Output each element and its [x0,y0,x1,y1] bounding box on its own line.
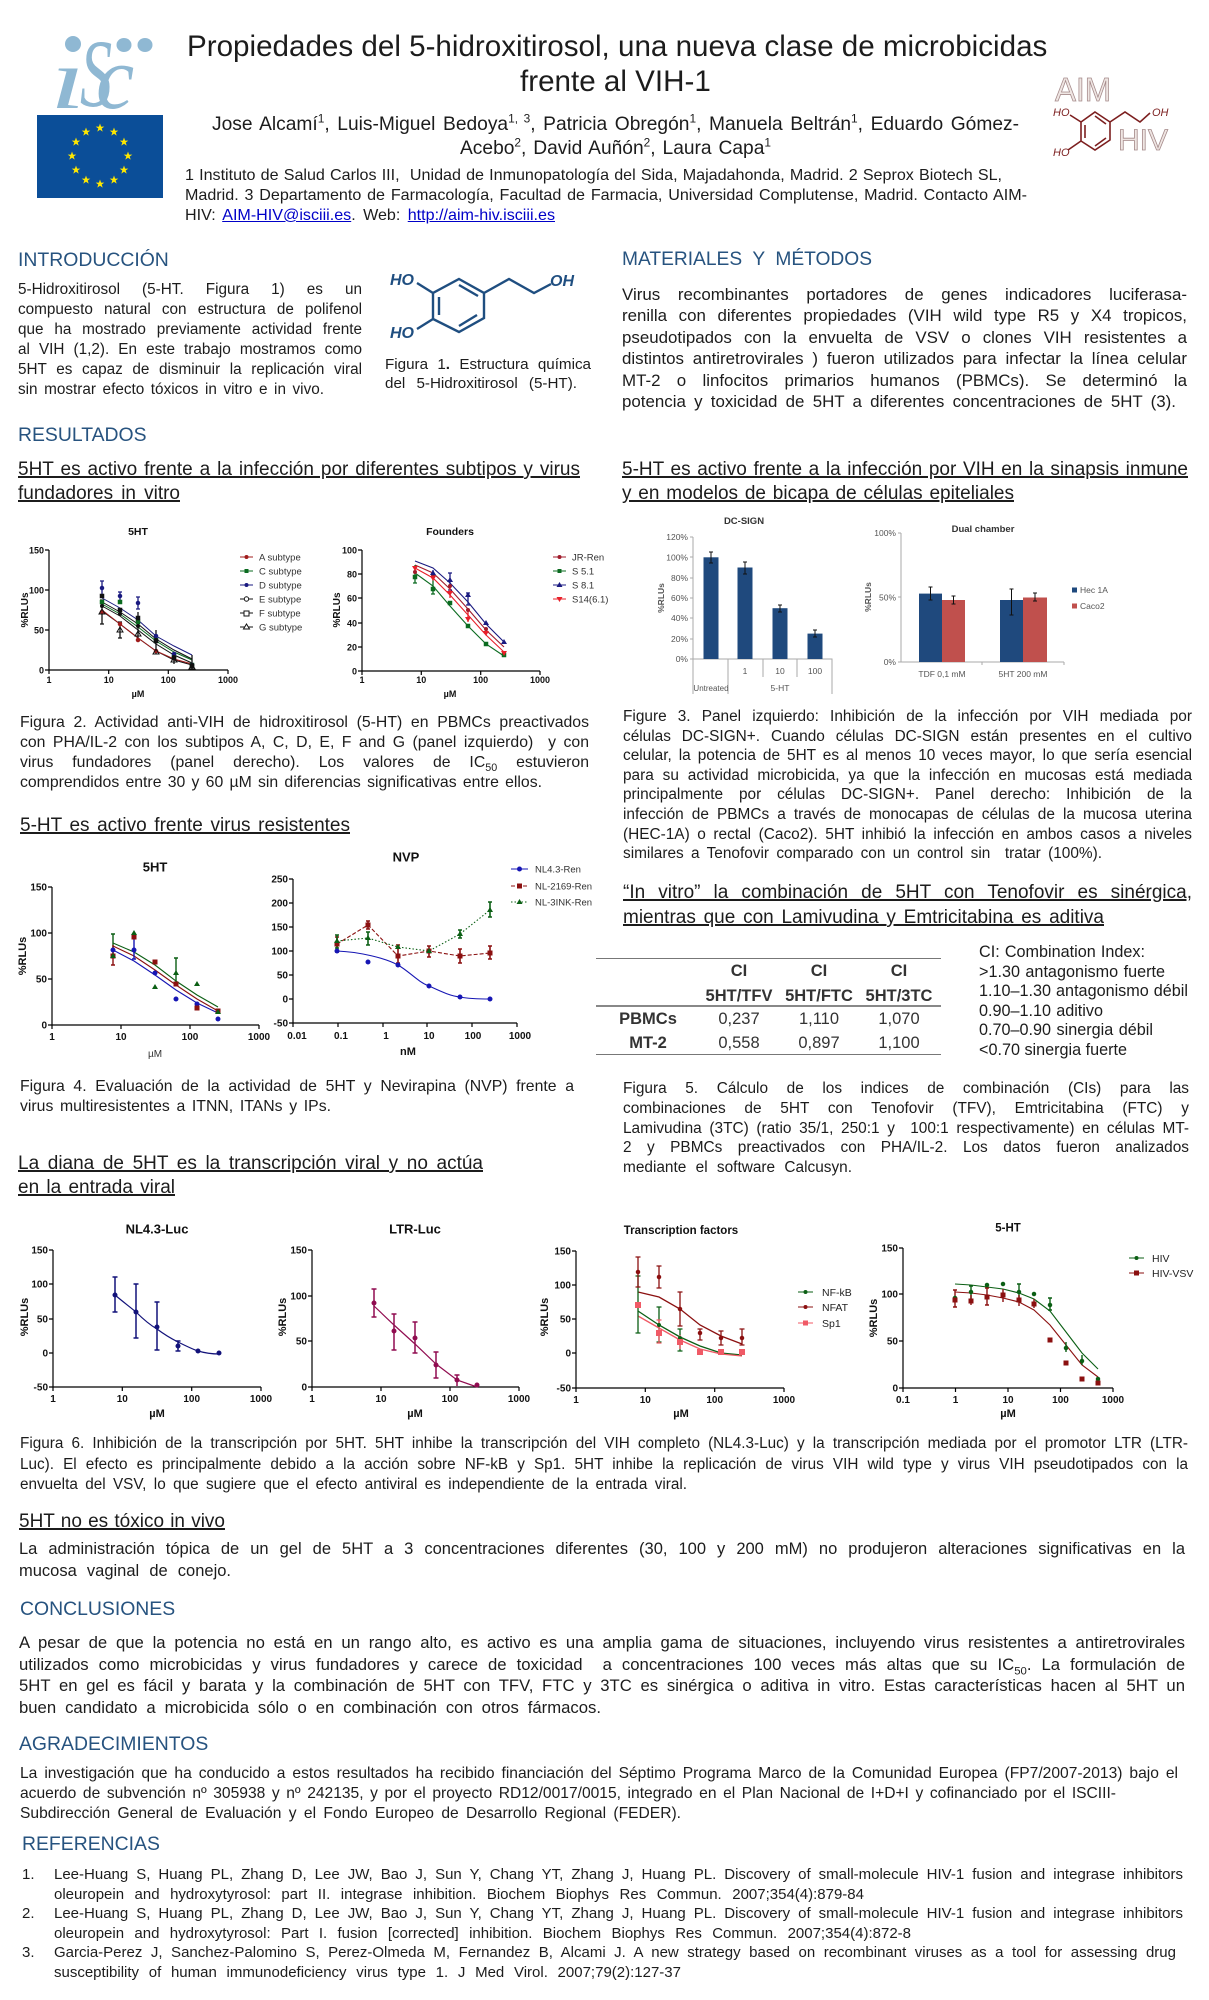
chart: 5HT subtypes: µM [132,689,144,699]
chart: NVP: 1000 [509,1031,532,1042]
legend: 5HT subtypes: G subtype [259,622,302,634]
table: combination index: 5HT/3TC [866,987,932,1005]
chart: Founders: 10 [416,675,426,685]
table: combination index: CI [891,962,907,980]
chart: NVP: 1 [383,1031,389,1042]
caption: figura 6: Figura 6. Inhibición de la transcripción por 5HT. 5HT inhibe la transcripción del VIH completo (NL4.3-Luc) y la transcripción mediada por el promotor LTR (LTR- [20,1435,1188,1452]
logo: AIM-HIV [1053,71,1169,159]
authors: Acebo2, David Auñón2, Laura Capa1 [460,135,771,158]
chart: NL4.3-Luc: -50 [34,1382,48,1394]
legend: Dual chamber [1072,585,1108,611]
chart: Dual chamber: TDF 0,1 mM [918,669,966,679]
chart: LTR-Luc: 0 [301,1382,307,1394]
chart: NVP: 100 [465,1031,482,1042]
affiliations [185,166,1027,224]
subheading: subtipos [18,459,580,504]
legend: Founders: S 8.1 [572,580,594,592]
chart: DC-SIGN: 60% [671,593,688,603]
chart: Transcription factors: 150 [554,1246,571,1258]
chart: 5HT resistant viruses: %RLUs [17,937,29,975]
chart: NVP: 150 [271,922,288,934]
chart: DC-SIGN [656,516,832,694]
caption: figura 3: (HEC-1A) o rectal (Caco2). 5HT inhibió la infección en ambos casos a niveles [623,826,1192,843]
text: conclusiones: A pesar de que la potencia no está en un rango alto, es activo es una amplia gama de situaciones, incluyendo virus resistentes a antiretrovirales [19,1633,1185,1652]
molecule: 5-hydroxytyrosol structure: OH [550,273,574,290]
title: frente al VIH-1 [520,65,711,98]
chart: NL4.3-Luc: 0 [42,1348,48,1360]
affiliations: HIV: AIM-HIV@isciii.es. Web: http://aim-hiv.isciii.es [185,206,555,224]
chart: Dual chamber [863,524,1108,679]
chart: LTR-Luc: 100 [442,1394,459,1405]
chart: NVP: 0.1 [334,1031,348,1042]
chart: DC-SIGN: DC-SIGN [724,516,764,527]
list: referencias: susceptibility of human immunodeficiency virus type 1. J Med Virol. 2007;79(2):127-37 [54,1964,681,1981]
table: combination index: CI [811,962,827,980]
chart: Transcription factors: 50 [560,1314,571,1326]
legend: 5HT subtypes [240,552,302,634]
chart: 5-HT HIV vs HIV-VSV: 100 [1052,1395,1069,1406]
chart: Dual chamber: %RLUs [863,582,873,612]
chart: 5-HT HIV vs HIV-VSV: 100 [881,1290,898,1300]
chart: Founders: 1000 [530,675,550,685]
caption: figura 2: con PHA/IL-2 con los subtipos A, C, D, E, F and G (panel izquierdo) y con [20,734,589,751]
subheading: virus resistentes: 5-HT es activo frente virus resistentes [20,815,350,836]
chart: 5HT subtypes: 5HT [128,526,149,538]
chart: NVP: 50 [277,970,288,982]
molecule: 5-hydroxytyrosol structure [390,272,574,342]
text: introducción: sin mostrar efecto tóxicos in vitro e in vivo. [18,381,324,398]
chart: 5-HT HIV vs HIV-VSV: %RLUs [868,1299,880,1337]
chart: Founders: 0 [352,666,357,676]
legend: NVP [511,864,592,908]
text: introducción: compuesto natural con estructura de polifenol [18,301,362,318]
chart: 5HT subtypes: 150 [29,546,44,556]
caption: figura 2 [20,714,589,791]
chart: LTR-Luc: 150 [290,1246,307,1256]
chart: NVP: 200 [271,898,288,910]
list: referencias: 1. [22,1866,35,1883]
text: materiales y métodos: pseudotipados con la envuelta de VSV o clones VIH resistentes a [622,328,1187,347]
logo: AIM-HIV: HIV [1118,124,1168,157]
table: combination index: 0,897 [798,1034,840,1052]
legend: 5HT subtypes: D subtype [259,580,302,592]
chart: DC-SIGN: 100 [808,666,822,676]
chart: NL4.3-Luc [19,1222,273,1420]
chart: Transcription factors: 0 [565,1348,571,1360]
chart: LTR-Luc: LTR-Luc [389,1222,441,1236]
chart: NL4.3-Luc: 10 [117,1394,128,1405]
legend: Transcription factors [798,1287,852,1330]
caption: figura 4: virus multiresistentes a ITNN, ITANs y IPs. [20,1098,331,1115]
table: combination index: 5HT/TFV [706,987,772,1005]
chart: 5HT resistant viruses: 0 [41,1020,47,1032]
chart: DC-SIGN: 1 [743,666,748,676]
caption: figura 6: envuelta del VSV, lo que sugiere que el efecto antiviral es independiente de la entrada viral. [20,1476,687,1493]
chart: 5HT subtypes [20,526,302,699]
legend: 5HT subtypes: A subtype [259,552,301,564]
text: conclusiones: 5HT en gel es fácil y barata y la combinación de 5HT con TFV, FTC y 3TC es sinérgica o aditiva in vitro. Estas características hacen al 5HT un [19,1676,1185,1695]
chart: DC-SIGN: 80% [671,573,688,583]
text: introducción [18,281,362,398]
chart: DC-SIGN: 5-HT [771,683,789,693]
title: Propiedades del 5-hidroxitirosol, una nueva clase de microbicidas [187,30,1047,63]
caption: figura 5: Figura 5. Cálculo de los indices de combinación (CIs) para las [623,1080,1189,1097]
logo: ISC: ı [50,31,86,127]
text: materiales y métodos [622,285,1188,411]
authors: Jose Alcamí1, Luis-Miguel Bedoya1, 3, Patricia Obregón1, Manuela Beltrán1, Eduardo Gómez- [212,112,1019,135]
chart: 5HT resistant viruses: 5HT [143,860,167,874]
chart: Transcription factors: 100 [554,1280,571,1292]
legend: combination index: CI: Combination Index: [979,943,1145,961]
subheading: combinación: “In vitro” la combinación de 5HT con Tenofovir es sinérgica, [623,882,1192,903]
logo: AIM-HIV: OH [1152,107,1169,119]
logo: ISC: S [80,20,112,127]
chart: 5HT subtypes: 100 [161,675,176,685]
chart: DC-SIGN: 120% [666,532,688,542]
heading: conclusiones: CONCLUSIONES [20,1598,175,1620]
caption: figura 5: combinaciones de 5HT con Tenofovir (TFV), Emtricitabina (FTC) y [623,1100,1189,1117]
chart: NVP: 100 [271,946,288,958]
text: introducción: que ha mostrado previamente actividad frente [18,321,362,338]
chart: 5HT resistant viruses: 10 [115,1032,127,1043]
text: introducción: 5HT es capaz de disminuir la replicación viral [18,361,362,378]
caption: figura 2: comprendidos entre 30 y 60 µM sin diferencias significativas entre ellos. [20,774,542,791]
logo: AIM-HIV: HO [1053,147,1070,159]
text: agradecimientos: acuerdo de subvención nº 305938 y nº 242135, y por el proyecto RD12/0017/0015, integrado en el Plan Nacional de I+D+I y cofinanciado por el ISCIII- [20,1785,1116,1802]
table: combination index: PBMCs [619,1010,677,1028]
caption: figura 1 [385,356,591,392]
chart: Founders: 80 [347,570,357,580]
table: combination index: 0,237 [718,1010,760,1028]
heading: introducción: INTRODUCCIÓN [18,249,169,271]
chart: NVP: NVP [393,850,420,864]
chart: DC-SIGN: 100% [666,552,688,562]
legend: Founders: S 5.1 [572,566,594,578]
table: combination index: CI [731,962,747,980]
table: combination index [596,958,941,1055]
text: conclusiones: buen candidato a microbicida sólo o en combinación con otros fármacos. [19,1698,601,1717]
logo: EU flag [37,115,163,198]
chart: LTR-Luc: 100 [290,1292,307,1302]
chart: NL4.3-Luc: 1000 [250,1394,273,1405]
chart: DC-SIGN: %RLUs [656,583,666,613]
chart: DC-SIGN: 0% [676,654,688,664]
table: combination index: 1,100 [878,1034,920,1052]
caption: figura 3 [623,708,1192,862]
legend: combination index [979,943,1188,1059]
chart: NVP: 10 [423,1031,435,1042]
chart: 5HT subtypes: %RLUs [20,592,31,628]
subheading: sinapsis: y en modelos de bicapa de células epiteliales [622,483,1014,504]
legend: 5HT subtypes: F subtype [259,608,301,620]
chart: 5HT subtypes: 50 [34,626,44,636]
chart: 5HT resistant viruses: µM [148,1049,162,1060]
text: materiales y métodos: renilla con diferentes propiedades (VIH wild type R5 y X4 tropicos, [622,306,1187,325]
subheading: combinación [623,882,1192,928]
legend: 5-HT [1129,1253,1193,1280]
chart: Founders: 100 [342,546,357,556]
legend: NVP: NL4.3-Ren [535,864,581,876]
chart: 5-HT HIV vs HIV-VSV: 0.1 [896,1395,910,1406]
chart: NVP [271,850,592,1058]
legend: Dual chamber: Hec 1A [1080,585,1108,595]
chart: 5HT resistant viruses: 1 [49,1032,55,1043]
chart: Founders: %RLUs [332,592,343,628]
molecule: 5-hydroxytyrosol structure: HO [390,272,415,289]
chart: NVP: -50 [274,1018,288,1030]
chart: Founders: 40 [347,618,357,628]
chart: Founders: 60 [347,594,357,604]
table: combination index: 1,070 [878,1010,920,1028]
caption: figura 6 [20,1435,1188,1493]
chart: LTR-Luc: 1 [309,1394,315,1405]
affiliations: Madrid. 3 Departamento de Farmacología, Facultad de Farmacia, Universidad Complutense, Madrid. Contacto AIM- [185,186,1027,204]
text: conclusiones [19,1633,1185,1717]
text: materiales y métodos: distintos antiretrovirales ) fueron utilizados para infectar la línea celular [622,349,1187,368]
chart: 5HT resistant viruses: 100 [182,1032,199,1043]
chart: Dual chamber: 100% [874,528,896,538]
subheading: diana: La diana de 5HT es la transcripción viral y no actúa [18,1153,483,1174]
chart: 5-HT HIV vs HIV-VSV: 150 [881,1244,898,1254]
legend: combination index: 0.70–0.90 sinergia débil [979,1021,1153,1039]
chart: Transcription factors: 1000 [773,1395,796,1406]
chart: DC-SIGN: 40% [671,613,688,623]
text: materiales y métodos: Virus recombinantes portadores de genes indicadores luciferasa- [622,285,1187,304]
chart: Dual chamber: 0% [884,657,896,667]
chart: NVP: 250 [271,874,288,886]
text: agradecimientos: La investigación que ha conducido a estos resultados ha recibido financiación del Séptimo Programa Marco de la Comunidad Europea (FP7/2007-2013) bajo el [20,1765,1178,1782]
table: combination index: 1,110 [799,1010,839,1028]
legend: NVP: NL-2169-Ren [535,882,592,892]
legend: combination index: >1.30 antagonismo fuerte [979,963,1165,981]
caption: figura 5: 2 y PBMCs preactivados con PHA/IL-2. Los datos fueron analizados [623,1139,1189,1156]
chart: Transcription factors [539,1225,852,1420]
caption: figura 3: similares a Tenofovir comparado con un control sin tratar (100%). [623,845,1102,862]
chart: 5-HT HIV vs HIV-VSV: 1000 [1102,1395,1125,1406]
chart: Founders: Founders [426,526,474,538]
chart: Founders [332,526,608,699]
chart: 5HT resistant viruses [17,860,271,1060]
chart: Founders: µM [444,689,456,699]
authors [212,112,1019,158]
chart: 5HT subtypes: 1 [46,675,52,685]
caption: figura 3: células DC-SIGN+. Cuando células DC-SIGN están presentes en el cultivo [623,728,1192,745]
table: combination index: MT-2 [629,1034,667,1052]
chart: DC-SIGN: 20% [671,634,688,644]
logo: ISC [50,20,152,128]
caption: figura 6: Luc). El efecto es principalmente debido a la acción sobre NF-kB y Sp1. 5HT inhibe la replicación de virus VIH wild type y virus VIH pseudotipados con la [20,1456,1188,1472]
list: referencias: oleuropein and hydroxytyrosol: part II. integrase inhibition. Biochem Biophys Res Commun. 2007;354(4):879-84 [54,1886,864,1903]
text: materiales y métodos: MT-2 o linfocitos primarios humanos (PBMCs). Se determinó la [622,371,1187,390]
legend: Transcription factors: NF-kB [822,1287,852,1299]
caption: figura 3: celular, la potencia de 5HT es al menos 10 veces mayor, lo que sería esencial [623,747,1192,764]
logo: ISC: c [96,28,134,128]
list: referencias [22,1866,1183,1981]
affiliations: 1 Instituto de Salud Carlos III, Unidad de Inmunopatología del Sida, Majadahonda, Madrid. 2 Seprox Biotech SL, [185,166,1002,184]
heading: resultados: RESULTADOS [18,424,147,446]
list: referencias: 2. [22,1905,35,1922]
text: agradecimientos: Subdirección General de Evaluación y el Fondo Europeo de Desarrollo Regional (FEDER). [20,1805,681,1822]
caption: figura 2: Figura 2. Actividad anti-VIH de hidroxitirosol (5-HT) en PBMCs preactivados [20,714,589,731]
chart: LTR-Luc: 10 [375,1394,387,1405]
legend: Founders: JR-Ren [572,552,604,564]
chart: Founders: 20 [347,642,357,652]
text: agradecimientos [20,1765,1178,1822]
text: introducción: al VIH (1,2). En este trabajo mostramos como [18,341,362,358]
legend: 5HT subtypes: E subtype [259,594,301,606]
chart: Founders: 1 [359,675,365,685]
subheading: combinación: mientras que con Lamivudina y Emtricitabina es aditiva [623,907,1104,928]
list: referencias: Garcia-Perez J, Sanchez-Palomino S, Perez-Olmeda M, Fernandez B, Alcami J. A new strategy based on recombinant viruses as a tool for assessing drug [54,1944,1176,1961]
list: referencias: Lee-Huang S, Huang PL, Zhang D, Lee JW, Bao J, Sun Y, Chang YT, Zhang J, Huang PL. Discovery of small-molecule HIV-1 fusion and integrase inhibitors [54,1905,1183,1922]
chart: LTR-Luc [277,1222,531,1420]
chart: Dual chamber: 50% [879,592,896,602]
chart: NVP: 0 [282,994,288,1006]
chart: 5-HT HIV vs HIV-VSV [868,1222,1193,1420]
chart: NL4.3-Luc: %RLUs [19,1298,31,1336]
legend: Founders [553,552,608,606]
text: materiales y métodos: potencia y toxicidad de 5HT a diferentes concentraciones de 5HT (3). [622,392,1176,411]
chart: 5HT subtypes: 100 [29,586,44,596]
subheading: toxicidad: 5HT no es tóxico in vivo [19,1511,225,1532]
chart: 5HT resistant viruses: 1000 [248,1032,271,1043]
chart: 5-HT HIV vs HIV-VSV: µM [1000,1408,1016,1420]
heading: materiales y métodos: MATERIALES Y MÉTODOS [622,249,872,270]
chart: 5HT resistant viruses: 100 [30,928,47,940]
legend: Transcription factors: NFAT [822,1302,849,1314]
chart: Transcription factors: µM [673,1408,689,1420]
chart: NL4.3-Luc: 50 [37,1314,48,1326]
chart: LTR-Luc: %RLUs [277,1298,289,1336]
caption: figura 3: infección de PBMCs a través de monocapas de células de la mucosa uterina [623,806,1192,823]
caption: figura 3: para su actividad microbicida, ya que la infección en mucosas está mediada [623,767,1192,784]
list: referencias: Lee-Huang S, Huang PL, Zhang D, Lee JW, Bao J, Sun Y, Chang YT, Zhang J, Huang PL. Discovery of small-molecule HIV-1 fusion and integrase inhibitors [54,1866,1183,1883]
chart: NL4.3-Luc: 150 [31,1246,48,1256]
caption: figura 4 [20,1078,574,1115]
chart: NVP: 0.01 [287,1031,307,1042]
legend: Dual chamber: Caco2 [1080,601,1105,611]
list: referencias: 3. [22,1944,35,1961]
legend: combination index: 1.10–1.30 antagonismo débil [979,982,1188,1000]
chart: 5HT resistant viruses: 150 [30,882,47,894]
chart: 5-HT HIV vs HIV-VSV: 10 [1002,1395,1014,1406]
legend: 5HT subtypes: C subtype [259,566,302,578]
chart: DC-SIGN: 10 [775,666,785,676]
chart: Transcription factors: -50 [557,1384,571,1394]
chart: DC-SIGN: Untreated [693,684,729,693]
chart: 5HT subtypes: 0 [39,666,44,676]
chart: 5-HT HIV vs HIV-VSV: 0 [892,1384,898,1394]
subheading: subtipos: fundadores in vitro [18,483,180,504]
text: toxicidad [19,1540,1186,1580]
subheading: sinapsis [622,459,1188,504]
title [187,30,1047,98]
chart: NL4.3-Luc: NL4.3-Luc [126,1222,188,1236]
legend: Founders: S14(6.1) [572,594,608,606]
chart: Transcription factors: 1 [573,1395,579,1406]
caption: figura 1: del 5-Hidroxitirosol (5-HT). [385,375,577,392]
molecule: 5-hydroxytyrosol structure: HO [390,325,415,342]
legend: Transcription factors: Sp1 [822,1318,841,1330]
chart: Founders: 100 [473,675,488,685]
chart: NL4.3-Luc: 1 [50,1394,56,1405]
logo: AIM-HIV: HO [1053,107,1070,119]
subheading: subtipos: 5HT es activo frente a la infección por diferentes subtipos y virus [18,459,580,480]
chart: 5-HT HIV vs HIV-VSV: 5-HT [995,1222,1021,1234]
text: conclusiones: utilizados como microbicidas y virus fundadores y carece de toxicidad a concentraciones 100 veces más altas que su IC50. La formulación de [19,1655,1185,1677]
list: referencias: oleuropein and hydroxytyrosol: Part I. fusion [corrected] inhibition. Biochem Biophys Res Commun. 2007;354(4):872-8 [54,1925,911,1942]
legend: combination index: <0.70 sinergia fuerte [979,1041,1127,1059]
chart: 5HT subtypes: 1000 [218,675,238,685]
caption: figura 3: principalmente por células DC-SIGN+. Panel derecho: Inhibición de la [623,786,1192,803]
chart: NL4.3-Luc: 100 [183,1394,200,1405]
caption: figura 5 [623,1080,1189,1176]
table: combination index: 5HT/FTC [785,987,853,1005]
chart: Transcription factors: %RLUs [539,1298,551,1336]
chart: Transcription factors: Transcription factors [624,1225,738,1237]
caption: figura 3: Figure 3. Panel izquierdo: Inhibición de la infección por VIH mediada por [623,708,1192,725]
caption: figura 2: virus fundadores (panel derecho). Los valores de IC50 estuvieron [20,754,589,774]
heading: referencias: REFERENCIAS [22,1833,160,1855]
chart: 5-HT HIV vs HIV-VSV: 50 [887,1336,898,1348]
chart: LTR-Luc: µM [407,1408,423,1420]
caption: figura 4: Figura 4. Evaluación de la actividad de 5HT y Nevirapina (NVP) frente a [20,1078,574,1095]
table: combination index: 0,558 [718,1034,760,1052]
chart: NVP: nM [400,1046,416,1058]
caption: figura 5: mediante el software Calcusyn. [623,1159,852,1176]
chart: Transcription factors: 100 [706,1395,723,1406]
chart: 5-HT HIV vs HIV-VSV: 1 [953,1395,959,1406]
subheading: sinapsis: 5-HT es activo frente a la infección por VIH en la sinapsis inmune [622,459,1188,480]
text: introducción: 5-Hidroxitirosol (5-HT. Figura 1) es un [18,281,362,298]
legend: NVP: NL-3INK-Ren [535,898,592,908]
chart: 5HT resistant viruses: 50 [36,974,47,986]
chart: NL4.3-Luc: 100 [31,1280,48,1290]
caption: figura 5: Lamivudina (3TC) (ratio 35/1, 250:1 y 100:1 respectivamente) en células MT- [623,1120,1189,1136]
subheading: diana: en la entrada viral [18,1177,175,1198]
logo: AIM-HIV: AIM [1055,71,1111,108]
chart: Dual chamber: 5HT 200 mM [999,669,1047,679]
legend: 5-HT: HIV [1152,1253,1170,1265]
text: toxicidad: La administración tópica de un gel de 5HT a 3 concentraciones diferentes (30, 100 y 200 mM) no produjeron alteraciones significativas en la [19,1540,1185,1558]
legend: 5-HT: HIV-VSV [1152,1268,1193,1280]
caption: figura 1: Figura 1. Estructura química [385,356,591,373]
chart: Transcription factors: 10 [640,1395,651,1406]
chart: Dual chamber: Dual chamber [952,524,1015,535]
text: toxicidad: mucosa vaginal de conejo. [19,1562,231,1580]
chart: LTR-Luc: 1000 [508,1394,531,1405]
chart: 5HT subtypes: 10 [104,675,114,685]
heading: agradecimientos: AGRADECIMIENTOS [19,1733,208,1755]
chart: NL4.3-Luc: µM [149,1408,165,1420]
subheading: diana [18,1153,483,1198]
chart: LTR-Luc: 50 [296,1336,307,1348]
legend: combination index: 0.90–1.10 aditivo [979,1002,1103,1020]
